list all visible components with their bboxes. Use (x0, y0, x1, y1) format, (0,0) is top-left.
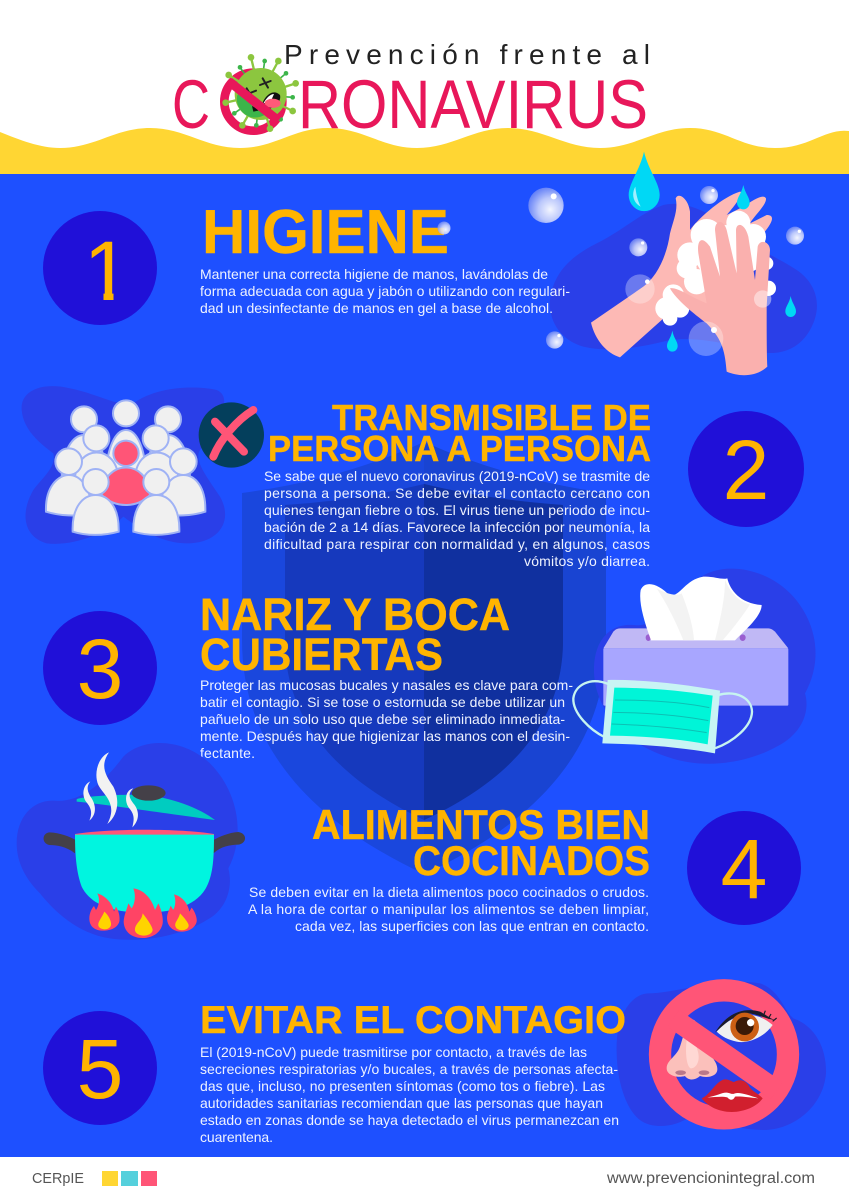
text block: nariz y boca: Proteger las mucosas bucales y nasales es clave para com- (200, 677, 573, 693)
heading: nariz y boca: CUBIERTAS (200, 629, 443, 680)
heading: evitar el contagio: EVITAR EL CONTAGIO (200, 999, 626, 1042)
number badge 5: 5 (77, 1022, 123, 1116)
number badge 4: 4 (721, 822, 767, 916)
text block: transmisible: vómitos y/o diarrea. (524, 553, 650, 569)
text block: transmisible: bación de 2 a 14 días. Favorece la infección por neumonía, la (264, 519, 650, 535)
icon: crossed-out virus (222, 54, 299, 132)
number badge 2 (688, 411, 804, 527)
footer (0, 1157, 849, 1200)
number badge 1 (43, 211, 157, 325)
number badge 5 (43, 1011, 157, 1125)
heading: alimentos: COCINADOS (413, 837, 650, 884)
title: C (172, 66, 210, 143)
heading: transmisible (268, 397, 651, 469)
number badge 4 (687, 811, 801, 925)
text block: evitar el contagio (200, 1044, 619, 1145)
text block: evitar el contagio: estado en zonas donde se haya detectado el virus permanezcan en (200, 1112, 619, 1128)
heading: alimentos (312, 801, 650, 884)
icon: small bubble (438, 222, 450, 234)
title (172, 39, 650, 143)
heading: transmisible: TRANSMISIBLE DE (332, 397, 651, 438)
text block: transmisible (264, 468, 650, 569)
text block: evitar el contagio: El (2019-nCoV) puede trasmitirse por contacto, a través de las (200, 1044, 587, 1060)
heading: higiene: HIGIENE (202, 198, 449, 267)
text block: nariz y boca: mente. Después hay que higienizar las manos con el desin- (200, 728, 570, 744)
number badge 1: 1 (84, 224, 130, 318)
text block: transmisible: persona a persona. Se debe evitar el contacto cercano con (264, 485, 650, 501)
text block: alimentos (248, 884, 649, 934)
heading: alimentos: ALIMENTOS BIEN (312, 801, 650, 848)
icon: washing hands (528, 152, 817, 375)
text block: higiene (200, 266, 570, 316)
yellow wave band (0, 128, 849, 174)
number badge 3 (43, 611, 157, 725)
text block: higiene: forma adecuada con agua y jabón o utilizando con regulari- (200, 283, 570, 299)
icon: tissue box and mask (573, 569, 816, 764)
number badge 2: 2 (723, 423, 769, 517)
text block: nariz y boca (200, 677, 573, 761)
website: www.prevencionintegral.com (606, 1170, 815, 1187)
text block: nariz y boca: fectante. (200, 745, 255, 761)
text block: alimentos: Se deben evitar en la dieta alimentos poco cocinados o crudos. (249, 884, 649, 900)
text block: nariz y boca: batir el contagio. Si se tose o estornuda se debe utilizar un (200, 694, 565, 710)
icon: no touching face (617, 982, 826, 1130)
text block: evitar el contagio: autoridades sanitarias recomiendan que las personas que hayan (200, 1095, 603, 1111)
icon: cooking pot on flames (17, 743, 245, 940)
heading: transmisible: PERSONA A PERSONA (268, 428, 651, 469)
text block: nariz y boca: pañuelo de un solo uso que debe ser eliminado inmediata- (200, 711, 565, 727)
number badge 3: 3 (77, 622, 123, 716)
text block: alimentos: A la hora de cortar o manipular los alimentos se deben limpiar, (248, 901, 649, 917)
text block: higiene: Mantener una correcta higiene de manos, lavándolas de (200, 266, 548, 282)
text block: evitar el contagio: cuarentena. (200, 1129, 273, 1145)
text block: transmisible: quienes tengan fiebre o tos. El virus tiene un periodo de incu- (264, 502, 650, 518)
text block: transmisible: dificultad para respirar con normalidad y, en algunos, casos (264, 536, 650, 552)
icon: crowd of people (22, 386, 264, 544)
heading: nariz y boca (200, 589, 510, 680)
text block: alimentos: cada vez, las superficies con las que entran en contacto. (295, 918, 649, 934)
text block: evitar el contagio: secreciones respiratorias y/o bucales, a través de personas afecta- (200, 1061, 618, 1077)
text block: transmisible: Se sabe que el nuevo coronavirus (2019-nCoV) se trasmite de (264, 468, 650, 484)
heading: nariz y boca: NARIZ Y BOCA (200, 589, 510, 640)
background shield (242, 442, 606, 874)
text block: evitar el contagio: das que, incluso, no presenten síntomas (como tos o fiebre). Las (200, 1078, 605, 1094)
colour squares (102, 1171, 157, 1186)
title: Prevención frente al (284, 39, 650, 70)
footer label: CERpIE (32, 1171, 84, 1187)
text block: higiene: dad un desinfectante de manos en gel a base de alcohol. (200, 300, 553, 316)
title: RONAVIRUS (298, 66, 648, 143)
